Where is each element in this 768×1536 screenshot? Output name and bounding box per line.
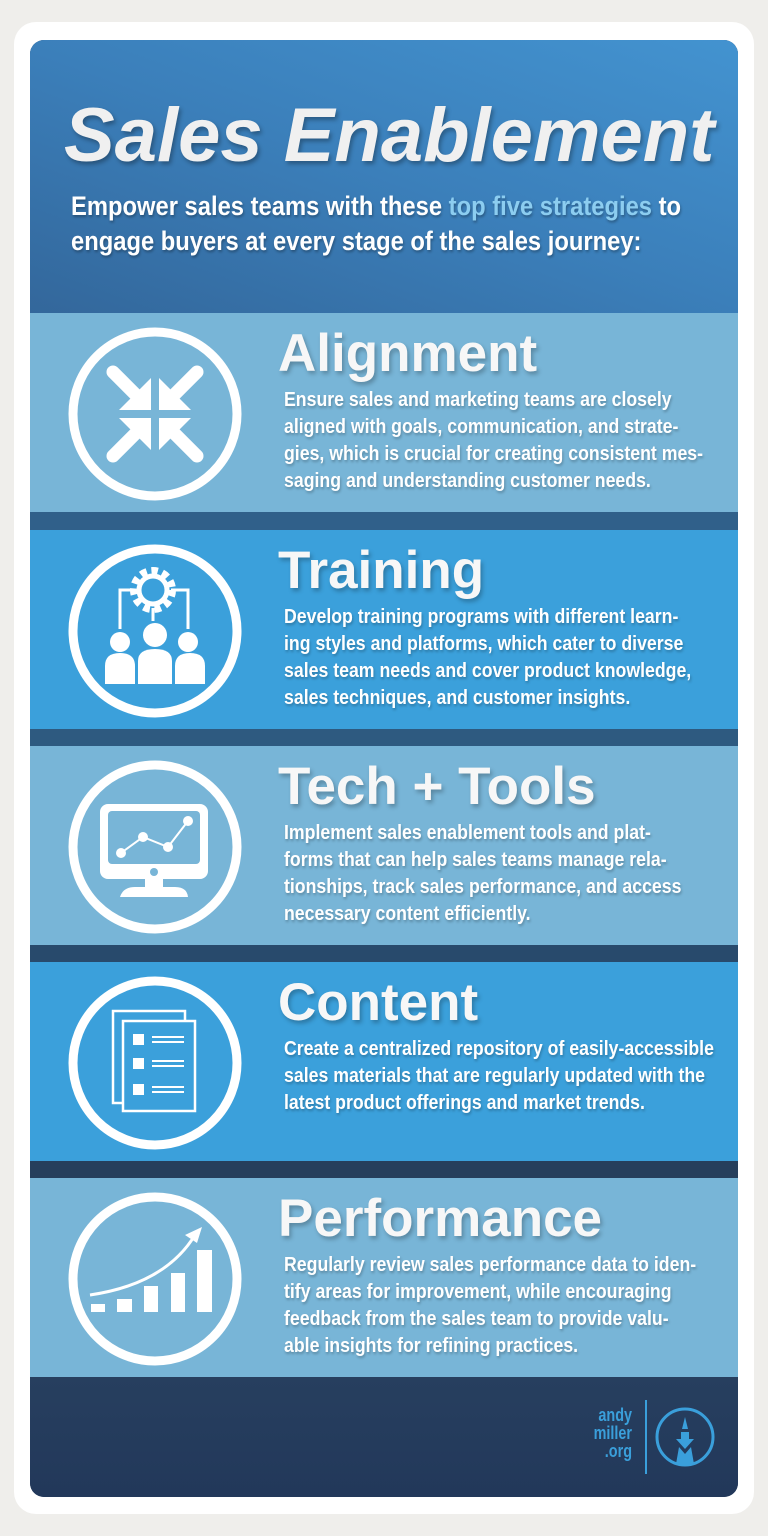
text: alignment: Ensure sales and marketing teams are closely (284, 389, 672, 411)
panel: alignment (30, 313, 738, 512)
text: performance: able insights for refining practices. (284, 1335, 578, 1357)
text: content: Create a centralized repository of easily-accessible (284, 1038, 714, 1060)
icon: growth bars (68, 1192, 242, 1366)
logo text: miller (594, 1423, 632, 1443)
text: training: Develop training programs with different learn- (284, 606, 678, 628)
text: tech + tools: forms that can help sales teams manage rela- (284, 849, 667, 871)
footer (30, 1377, 738, 1497)
logo text (594, 1405, 632, 1461)
text: tech + tools: tionships, track sales performance, and access (284, 876, 681, 898)
text: content: latest product offerings and market trends. (284, 1092, 645, 1114)
subtitle: engage buyers at every stage of the sales journey: (71, 226, 641, 256)
text: performance (284, 1254, 698, 1359)
panel: performance (30, 1178, 738, 1377)
divider line (645, 1400, 647, 1474)
text: performance: Regularly review sales performance data to iden- (284, 1254, 696, 1276)
icon: team with gear (68, 544, 242, 718)
text: training: ing styles and platforms, which cater to diverse (284, 633, 683, 655)
icon: logo (656, 1408, 714, 1466)
icon: documents checklist (68, 976, 242, 1150)
icon: arrows converging (68, 328, 242, 500)
heading: alignment: Alignment (278, 324, 537, 383)
text: content (284, 1038, 716, 1116)
text: training: sales techniques, and customer insights. (284, 687, 630, 709)
text: alignment: saging and understanding customer needs. (284, 470, 651, 492)
title: Sales Enablement (64, 93, 714, 178)
logo text: .org (605, 1441, 632, 1461)
text: alignment: gies, which is crucial for creating consistent mes- (284, 443, 703, 465)
text: content: sales materials that are regularly updated with the (284, 1065, 705, 1087)
panel: tech + tools (30, 746, 738, 945)
subtitle: Empower sales teams with these top five strategies to (71, 191, 681, 221)
text: performance: tify areas for improvement, while encouraging (284, 1281, 672, 1303)
panel: training (30, 530, 738, 729)
text: tech + tools: Implement sales enablement tools and plat- (284, 822, 651, 844)
heading: training: Training (278, 541, 484, 600)
text: alignment (284, 389, 704, 494)
text: alignment: aligned with goals, communication, and strate- (284, 416, 678, 438)
heading: content: Content (278, 973, 478, 1032)
text: training: sales team needs and cover product knowledge, (284, 660, 691, 682)
text: training (284, 606, 692, 711)
heading: tech + tools: Tech + Tools (278, 757, 596, 816)
logo text: andy (598, 1405, 632, 1425)
text: tech + tools (284, 822, 682, 927)
text: performance: feedback from the sales team to provide valu- (284, 1308, 669, 1330)
panel: content (30, 962, 738, 1161)
heading: performance: Performance (278, 1189, 602, 1248)
text: tech + tools: necessary content efficiently. (284, 903, 531, 925)
icon: monitor with chart (68, 760, 242, 934)
subtitle (71, 191, 682, 258)
header (30, 40, 738, 313)
